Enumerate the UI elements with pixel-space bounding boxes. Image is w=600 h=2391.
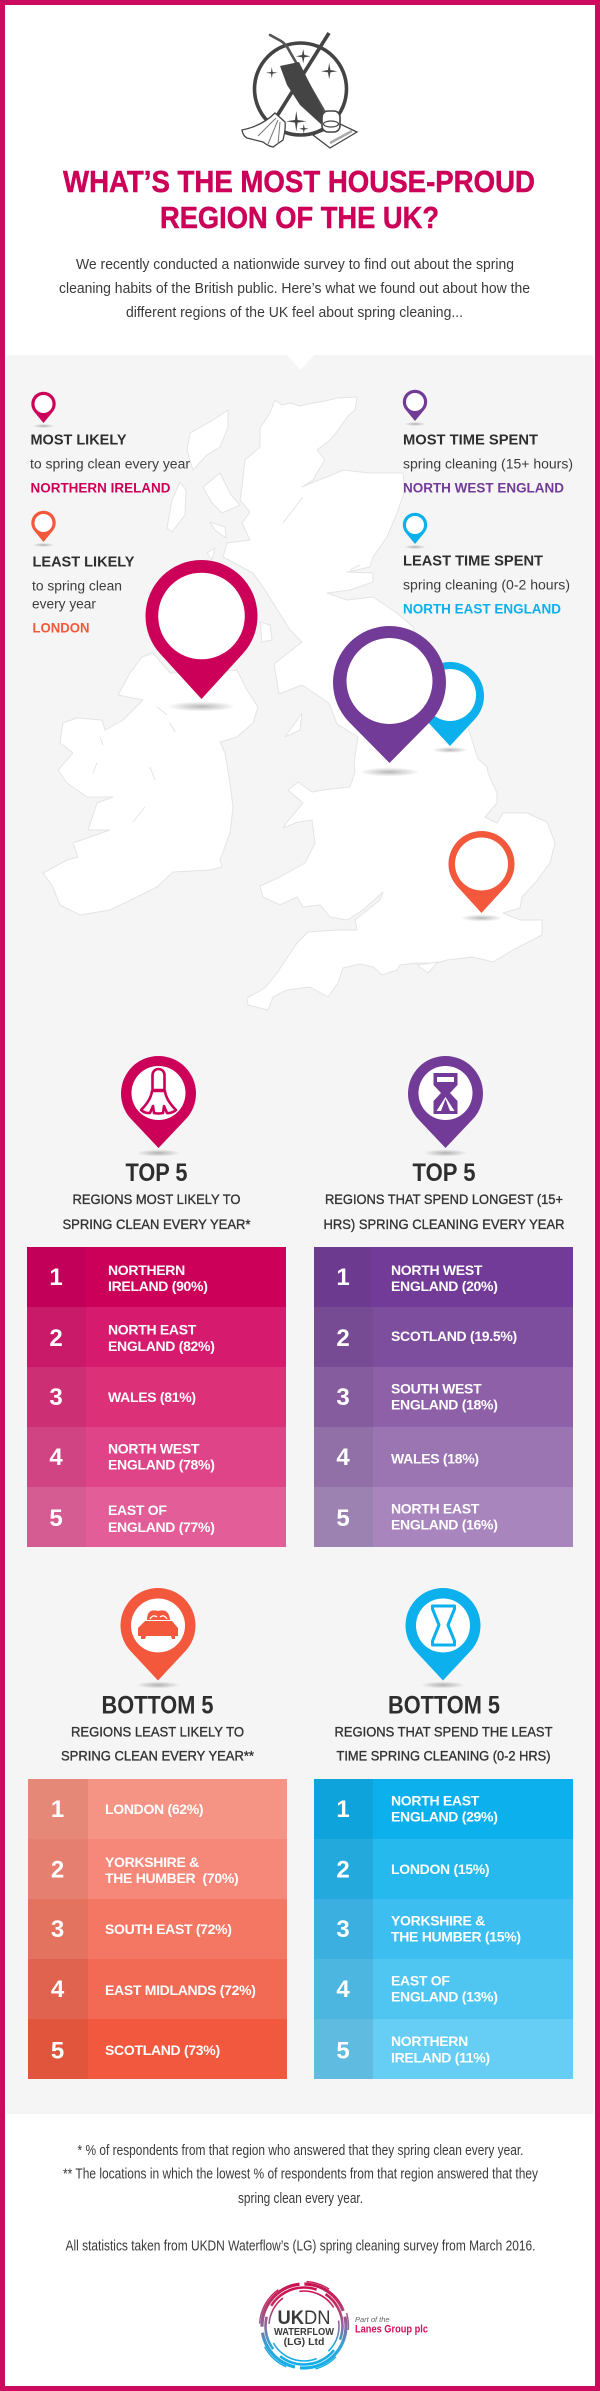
table: longest: NORTH EAST <box>391 1500 480 1516</box>
table: least time: ENGLAND (29%) <box>391 1808 498 1824</box>
table: most likely: IRELAND (90%) <box>108 1278 208 1294</box>
table: most likely: ENGLAND (77%) <box>108 1519 215 1535</box>
table: least likely: SCOTLAND (73%) <box>105 2042 220 2058</box>
table: most likely: 3 <box>49 1384 63 1411</box>
table: least time: LONDON (15%) <box>391 1861 489 1877</box>
table: least likely: SOUTH EAST (72%) <box>105 1921 232 1937</box>
logo tagline: Lanes Group plc <box>355 2324 428 2336</box>
icon: small orange pin <box>31 511 56 547</box>
table: most likely: 5 <box>49 1505 63 1532</box>
subheading: SPRING CLEAN EVERY YEAR* <box>62 1216 251 1232</box>
table: least time: THE HUMBER (15%) <box>391 1928 521 1944</box>
icon: bed pin <box>120 1588 196 1688</box>
icon: hourglass pin <box>408 1056 483 1156</box>
subheading <box>334 1724 553 1764</box>
table: longest: SOUTH WEST <box>391 1380 482 1396</box>
subheading <box>61 1724 254 1764</box>
table: longest: NORTH WEST <box>391 1262 483 1278</box>
legend: most likely: to spring clean every year <box>30 456 191 472</box>
table: most likely: NORTHERN <box>108 1262 185 1278</box>
table: least time: YORKSHIRE & <box>391 1912 485 1928</box>
logo swirl <box>260 2282 348 2370</box>
subheading: TIME SPRING CLEANING (0-2 HRS) <box>336 1748 550 1764</box>
legend: least likely: LONDON <box>32 620 90 636</box>
logo text: WATERFLOW <box>274 2326 334 2338</box>
legend: least likely: to spring clean <box>32 578 122 594</box>
legend: least time spent: spring cleaning (0-2 hours) <box>403 578 570 592</box>
intro text: different regions of the UK feel about spring cleaning... <box>126 304 463 321</box>
logo tagline: Part of the <box>355 2315 390 2324</box>
legend: least likely: LEAST LIKELY <box>32 554 134 570</box>
heading: top 5: TOP 5 <box>412 1159 476 1187</box>
table: least time: IRELAND (11%) <box>391 2050 490 2066</box>
table: longest: 3 <box>336 1384 350 1411</box>
logo text <box>274 2308 334 2348</box>
table: longest: SCOTLAND (19.5%) <box>391 1328 517 1344</box>
table: most likely: NORTH EAST <box>108 1322 197 1338</box>
logo tagline <box>355 2315 428 2336</box>
table: longest: ENGLAND (18%) <box>391 1396 498 1412</box>
table: longest: WALES (18%) <box>391 1450 479 1466</box>
table: most likely: NORTH WEST <box>108 1440 200 1456</box>
table: least time: 2 <box>336 1856 350 1884</box>
table: least likely: 3 <box>51 1916 64 1943</box>
table: least likely: EAST MIDLANDS (72%) <box>105 1982 256 1998</box>
footnotes: spring clean every year. <box>238 2191 363 2207</box>
legend: most likely <box>30 392 191 496</box>
icon: small purple pin <box>403 390 427 426</box>
table: most likely: ENGLAND (78%) <box>108 1456 215 1472</box>
table: least time: 1 <box>336 1796 350 1823</box>
map pin: Northern Ireland <box>145 560 258 712</box>
legend: most time spent: MOST TIME SPENT <box>403 432 538 448</box>
icon: broom pin <box>121 1056 196 1156</box>
table: longest <box>314 1247 573 1547</box>
intro text <box>59 256 530 321</box>
table: least likely <box>28 1779 287 2079</box>
table: longest: 5 <box>336 1505 350 1532</box>
table: most likely <box>27 1247 286 1547</box>
table: least time: NORTH EAST <box>391 1792 480 1808</box>
map pin: North East England <box>416 662 484 753</box>
title: REGION OF THE UK? <box>160 200 439 235</box>
legend: most likely: NORTHERN IRELAND <box>30 480 171 496</box>
table: longest: 2 <box>336 1325 350 1352</box>
subheading: SPRING CLEAN EVERY YEAR** <box>61 1748 254 1764</box>
map pin: London <box>449 831 514 922</box>
section: bottom 5 least time <box>314 1588 573 2079</box>
legend: least likely: every year <box>32 596 97 612</box>
map: UK and Ireland <box>43 397 555 1010</box>
table: least likely: LONDON (62%) <box>105 1801 203 1817</box>
subheading: REGIONS THAT SPEND LONGEST (15+ <box>325 1191 563 1207</box>
table: least likely: 5 <box>51 2038 64 2064</box>
legend: least time spent: LEAST TIME SPENT <box>403 552 543 570</box>
table: longest: ENGLAND (20%) <box>391 1278 498 1294</box>
title <box>63 164 535 235</box>
footnotes <box>63 2143 539 2254</box>
section: top 5 most likely <box>27 1056 286 1547</box>
table: least likely: 2 <box>51 1856 64 1884</box>
table: least time: ENGLAND (13%) <box>391 1988 498 2004</box>
icon: vacuum and mop <box>242 33 357 148</box>
table: most likely: 4 <box>49 1444 63 1471</box>
subheading: HRS) SPRING CLEANING EVERY YEAR <box>324 1216 564 1232</box>
panel: grey background <box>6 355 594 2114</box>
legend: least likely <box>31 511 134 636</box>
heading: bottom 5: BOTTOM 5 <box>102 1692 214 1720</box>
intro text: cleaning habits of the British public. Here’s what we found out about how the <box>59 280 530 297</box>
logo text: UKDN <box>278 2308 330 2329</box>
subheading <box>62 1191 251 1232</box>
legend: most time spent <box>403 390 573 496</box>
table: least time: EAST OF <box>391 1972 450 1988</box>
table: most likely: ENGLAND (82%) <box>108 1338 215 1354</box>
table: least time: NORTHERN <box>391 2033 468 2049</box>
icon: hourglass pin blue <box>405 1588 480 1688</box>
title: WHAT’S THE MOST HOUSE-PROUD <box>63 164 535 199</box>
heading: bottom 5: BOTTOM 5 <box>388 1692 500 1720</box>
legend: most time spent: spring cleaning (15+ hours) <box>403 456 573 472</box>
table: longest: 4 <box>336 1444 350 1471</box>
table: longest: 1 <box>336 1264 350 1291</box>
subheading: REGIONS MOST LIKELY TO <box>72 1191 241 1207</box>
legend: most likely: MOST LIKELY <box>30 432 126 448</box>
notch arrow <box>287 355 314 370</box>
subheading: REGIONS THAT SPEND THE LEAST <box>334 1724 553 1740</box>
legend: most time spent: NORTH WEST ENGLAND <box>403 480 564 496</box>
table: least time <box>314 1779 573 2079</box>
section: bottom 5 least likely <box>28 1588 287 2079</box>
icon: small magenta pin <box>31 392 56 428</box>
table: longest: ENGLAND (16%) <box>391 1516 498 1532</box>
table: most likely: 1 <box>49 1264 63 1291</box>
table: most likely: EAST OF <box>108 1502 167 1518</box>
table: most likely: 2 <box>49 1325 63 1352</box>
intro text: We recently conducted a nationwide survey to find out about the spring <box>76 256 514 273</box>
table: least time: 5 <box>336 2038 350 2064</box>
logo: UKDN Waterflow <box>260 2282 428 2370</box>
logo text: (LG) Ltd <box>284 2336 324 2348</box>
subheading <box>324 1191 564 1232</box>
legend: least time spent: NORTH EAST ENGLAND <box>403 602 561 616</box>
section: top 5 longest <box>314 1056 573 1547</box>
map pin: North West England <box>333 626 446 776</box>
table: least likely: YORKSHIRE & <box>105 1854 199 1870</box>
icon: small blue pin <box>403 513 427 549</box>
legend: least time spent <box>403 513 570 616</box>
table: least likely: 4 <box>51 1976 65 2003</box>
subheading: REGIONS LEAST LIKELY TO <box>71 1724 244 1740</box>
table: most likely: WALES (81%) <box>108 1389 196 1405</box>
table: least time: 3 <box>336 1916 350 1943</box>
heading: top 5: TOP 5 <box>126 1159 188 1187</box>
table: least time: 4 <box>336 1976 350 2003</box>
table: least likely: THE HUMBER (70%) <box>105 1870 238 1886</box>
table: least likely: 1 <box>51 1796 64 1823</box>
